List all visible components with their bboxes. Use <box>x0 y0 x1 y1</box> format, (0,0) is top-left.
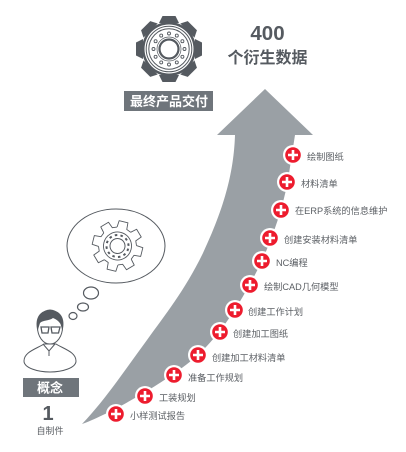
step: bill of materials <box>277 172 338 192</box>
icon: final product gear <box>136 16 202 82</box>
step: drawing paper: 绘制图纸 <box>307 151 344 162</box>
label: concept <box>23 378 79 397</box>
stat: 1 self-made: 自制件 <box>36 425 64 436</box>
step: installation bill of materials <box>260 228 358 248</box>
step: NC programming: NC编程 <box>276 257 308 268</box>
stat: 1 self-made: 1 <box>42 403 54 425</box>
label: final product delivery <box>124 91 213 111</box>
step: ERP maintenance <box>271 200 387 220</box>
label: concept: 概念 <box>37 380 63 396</box>
step: NC programming <box>252 251 308 271</box>
step: prepare work plan: 准备工作规划 <box>188 372 243 383</box>
step: machining drawing <box>210 322 288 342</box>
step: machining bill of materials <box>188 345 286 365</box>
heading: 400 derived data <box>227 22 308 67</box>
heading: 400 derived data: 400 <box>250 22 285 45</box>
step: CAD geometry: 绘制CAD几何模型 <box>264 281 339 292</box>
stat: 1 self-made <box>36 403 64 436</box>
step: work plan <box>225 300 303 320</box>
label: final product delivery: 最终产品交付 <box>130 94 208 109</box>
step: tooling plan <box>135 386 196 406</box>
step: drawing paper <box>283 145 344 165</box>
step: bill of materials: 材料清单 <box>301 178 338 189</box>
step: machining bill of materials: 创建加工材料清单 <box>212 352 286 363</box>
heading: 400 derived data: 个衍生数据 <box>227 49 308 67</box>
step: sample test report: 小样测试报告 <box>130 410 185 421</box>
thought bubble with gear <box>67 209 165 320</box>
step: ERP maintenance: 在ERP系统的信息维护 <box>295 205 387 216</box>
step: machining drawing: 创建加工图纸 <box>233 328 288 339</box>
step: sample test report <box>106 404 185 424</box>
icon: person with glasses <box>24 310 76 372</box>
step markers and labels <box>106 145 387 424</box>
step: prepare work plan <box>164 365 243 385</box>
growth arrow <box>82 89 313 424</box>
step: work plan: 创建工作计划 <box>248 306 303 317</box>
step: CAD geometry <box>240 275 339 295</box>
step: tooling plan: 工装规划 <box>159 392 196 403</box>
step: installation bill of materials: 创建安装材料清单 <box>284 234 358 245</box>
